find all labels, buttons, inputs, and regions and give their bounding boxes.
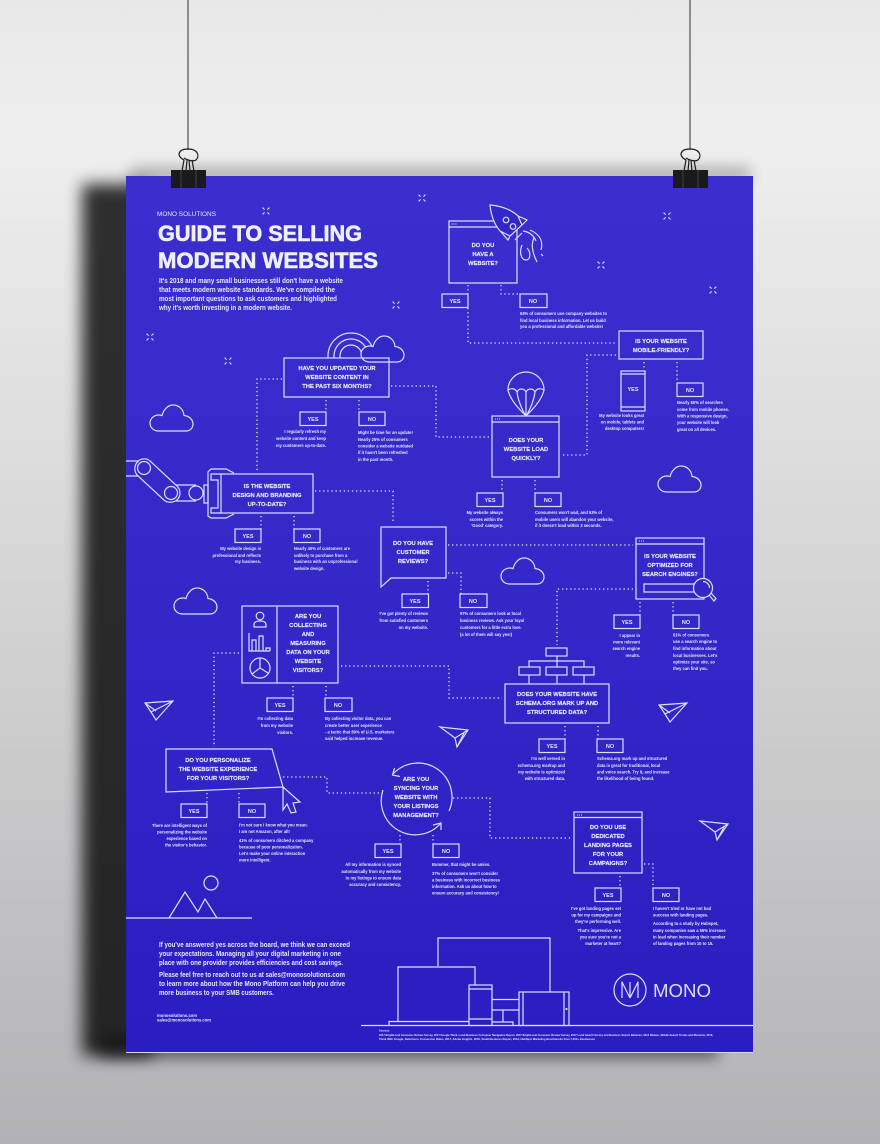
question box: ARE YOU: [295, 614, 321, 620]
no badge: [433, 844, 459, 858]
no answer text: - a tactic that 89% of U.S. marketers: [325, 730, 395, 734]
no answer text: website design.: [293, 566, 324, 571]
question box: SCHEMA.ORG MARK UP AND: [516, 701, 598, 707]
intro paragraph: It's 2018 and many small businesses still don't have a website: [159, 278, 343, 285]
icon: org chart: [519, 648, 594, 684]
question shape: THE WEBSITE EXPERIENCE: [179, 767, 257, 773]
window box: QUICKLY?: [511, 456, 541, 462]
no answer text: By collecting visitor data, you can: [325, 716, 392, 721]
no answer text: Might be time for an update!: [358, 430, 413, 435]
yes answer text: [257, 716, 294, 735]
intro paragraph: that meets modern website standards. We've compiled the: [159, 287, 335, 294]
yes badge: YES: [484, 498, 496, 504]
window box: HAVE A: [472, 252, 494, 258]
title: GUIDE TO SELLING: [158, 221, 362, 246]
binder clip right: [673, 149, 708, 188]
question text: WEBSITE WITH: [395, 795, 437, 801]
yes answer text: [152, 823, 208, 848]
yes answer text: My website design is: [220, 546, 262, 551]
icon: rainbow and cloud: [328, 333, 404, 362]
no answer text: customers for a little extra love.: [460, 625, 522, 630]
yes answer text: with structured data.: [524, 776, 565, 781]
icon: robot arm: [126, 459, 234, 518]
speech bubble: REVIEWS?: [398, 559, 429, 565]
yes answer text: [341, 862, 402, 887]
yes answer text: [467, 510, 504, 528]
no answer text: in lead when increasing their number: [653, 934, 726, 940]
no answer text: [239, 822, 314, 862]
yes badge: YES: [307, 417, 319, 423]
no answer text: Nearly 40% of customers are: [294, 546, 351, 551]
sources: [379, 1028, 713, 1041]
no answer text: Nearly 60% of searches: [677, 400, 723, 405]
speech bubble: CUSTOMER: [396, 550, 430, 556]
question: schema markup: [505, 648, 670, 781]
no answer text: create better user experience: [325, 723, 383, 728]
question box: THE PAST SIX MONTHS?: [302, 384, 372, 390]
sources: Sources:: [379, 1028, 390, 1032]
question box: [221, 474, 313, 513]
closing text: Please feel free to reach out to us at sales@monosolutions.com: [159, 972, 345, 979]
no answer text: unlikely to purchase from a: [294, 553, 348, 558]
no answer text: 97% of consumers look at local: [460, 611, 521, 616]
question: collecting data: [242, 606, 395, 741]
icon: magnifier: [694, 578, 716, 601]
no answer text: [673, 632, 718, 671]
circular arrows: [381, 763, 452, 835]
no answer text: if it doesn't load within 3 seconds.: [535, 523, 601, 528]
intro paragraph: most important questions to ask customers and highlighted: [159, 296, 337, 303]
question: updated content: [275, 333, 414, 462]
no badge: NO: [248, 809, 257, 815]
yes answer text: schema.org markup and: [518, 763, 565, 768]
question shape: DO YOU PERSONALIZE: [185, 758, 251, 764]
title: MODERN WEBSITES: [158, 248, 378, 273]
question box: STRUCTURED DATA?: [527, 710, 588, 716]
no answer text: great on all devices.: [677, 427, 716, 432]
question text: ARE YOU: [403, 777, 429, 783]
yes answer text: you sure you're not a: [580, 934, 622, 940]
yes answer text: I regularly refresh my: [284, 429, 327, 434]
yes answer text: I've got plenty of reviews: [379, 611, 429, 616]
no badge: NO: [686, 388, 695, 394]
no answer text: Schema.org mark up and structured: [597, 756, 668, 761]
speech bubble: [381, 527, 446, 587]
yes badge: YES: [242, 534, 254, 540]
question: load quickly: [467, 372, 613, 528]
window box: [449, 221, 517, 283]
icon: bar chart: [249, 633, 270, 651]
intro paragraph: why it's worth investing in a modern website.: [158, 305, 292, 312]
window box: OPTIMIZED FOR: [647, 563, 694, 569]
yes answer text: on my website.: [399, 625, 428, 630]
yes answer text: the visitor's behavior.: [165, 842, 207, 848]
window box: WEBSITE LOAD: [504, 447, 548, 453]
yes badge: YES: [621, 620, 633, 626]
yes answer text: from satisfied customers: [379, 618, 429, 623]
no answer text: [358, 430, 414, 462]
window box: WEBSITE?: [468, 261, 498, 267]
no badge: [325, 698, 352, 712]
no badge: NO: [544, 498, 553, 504]
yes answer text: to my listings to ensure data: [345, 876, 402, 880]
no answer text: [460, 611, 524, 637]
no badge: NO: [606, 744, 615, 750]
illustration: devices: [361, 938, 753, 1026]
question text: [393, 777, 439, 819]
no answer text: [677, 400, 729, 432]
no answer text: 41% of consumers ditched a company: [239, 838, 314, 843]
closing text: to learn more about how the Mono Platform can help you drive: [159, 981, 345, 988]
no answer text: said helped increase revenue.: [325, 736, 383, 741]
icon: phone with yes: YES: [627, 387, 639, 393]
question box: IS YOUR WEBSITE: [635, 339, 687, 345]
no answer text: business with an unprofessional: [294, 559, 357, 564]
question box: MOBILE-FRIENDLY?: [633, 348, 690, 354]
question: do you have a website: [442, 205, 607, 329]
closing text: If you've answered yes across the board, we think we can exceed: [159, 942, 350, 949]
yes answer text: [518, 756, 565, 781]
no badge: NO: [368, 417, 377, 423]
no badge: NO: [682, 620, 691, 626]
no answer text: Let's make your online interaction: [239, 851, 306, 856]
yes answer text: marketer at heart?: [585, 941, 621, 946]
yes badge: [442, 294, 468, 308]
window box: DEDICATED: [591, 834, 625, 840]
no badge: NO: [662, 893, 671, 899]
question box: [242, 606, 338, 683]
closing text: more business to your SMB customers.: [159, 990, 274, 997]
yes badge: YES: [409, 599, 421, 605]
window box: SEARCH ENGINES?: [642, 572, 698, 578]
window box: FOR YOUR: [593, 852, 624, 858]
dotted flow connectors: [207, 285, 677, 888]
yes answer text: website content and keep: [275, 436, 326, 441]
window box: DO YOU: [472, 243, 494, 249]
no badge: [460, 594, 487, 608]
contact links: monosolutions.com: [157, 1013, 197, 1019]
no answer text: [597, 756, 670, 781]
question box: UP-TO-DATE?: [248, 502, 287, 508]
icon: rocket: [490, 205, 543, 262]
no answer text: consider a website outdated: [358, 444, 414, 448]
question: syncing listings: [341, 763, 501, 896]
yes badge: [267, 698, 293, 712]
closing text: place with one provider provides efficiencies and cost savings.: [159, 960, 343, 967]
yes answer text: [379, 611, 429, 630]
no answer text: Nearly 25% of consumers: [358, 437, 409, 442]
closing text: your expectations. Managing all your digital marketing in one: [159, 951, 341, 958]
no answer text: many companies saw a 55% increase: [653, 928, 726, 933]
no answer text: [653, 906, 726, 946]
question box: [619, 331, 703, 359]
no answer text: in the past month.: [358, 457, 393, 462]
yes answer text: [275, 429, 327, 448]
question box: [284, 358, 389, 397]
window box: DO YOU USE: [590, 825, 626, 831]
no answer text: and voice search. Try it, and increase: [597, 770, 670, 774]
no answer text: I haven't tried or have not had: [653, 906, 712, 911]
no badge: NO: [442, 849, 451, 855]
no answer text: come from mobile phones.: [677, 407, 729, 412]
yes answer text: desktop computers!: [605, 426, 644, 431]
brand label: MONO SOLUTIONS: [157, 211, 216, 218]
no answer text: the likelihood of being found.: [597, 776, 654, 781]
window box: [574, 812, 642, 873]
icon: parachute: [508, 372, 544, 416]
no badge: [597, 739, 623, 752]
no answer text: ensure accuracy and consistency!: [432, 890, 499, 896]
title: [158, 221, 378, 273]
window box: [492, 416, 559, 477]
no badge: [239, 804, 265, 818]
no answer text: Consumers won't wait, and 53% of: [535, 510, 603, 515]
yes answer text: scores within the: [470, 517, 504, 522]
yes answer text: visitors.: [277, 730, 293, 735]
yes answer text: personalizing the website: [157, 830, 208, 834]
closing text: [159, 942, 350, 997]
yes answer text: my business.: [235, 559, 261, 564]
yes answer text: 'Good' category.: [471, 523, 503, 528]
no answer text: find local business information. Let us build: [520, 318, 606, 323]
sparkle decorations: [147, 195, 716, 364]
no answer text: [325, 716, 395, 741]
no answer text: they can find you.: [673, 666, 708, 671]
question text: MANAGEMENT?: [393, 813, 439, 819]
question box: AND: [302, 632, 314, 638]
yes badge: YES: [382, 849, 394, 855]
binder clip left: [171, 149, 206, 188]
window box: [636, 538, 704, 599]
question: personalize: [152, 749, 314, 862]
yes answer text: I'm well versed in: [531, 756, 565, 761]
yes answer text: automatically from my website: [341, 869, 402, 874]
yes badge: YES: [602, 893, 614, 899]
no badge: NO: [469, 599, 478, 605]
yes answer text: My website looks great: [599, 413, 645, 418]
question box: WEBSITE: [295, 659, 321, 665]
sources: Think With Google, Salesforce, Conversion Rates, 2017, Adobe Insights, 2016, Small Business Report, 2016, HubSpot Marketing Benchmarks from 7,000+ Businesses: [379, 1037, 596, 1041]
yes badge: [477, 493, 503, 506]
no answer text: I am not Amazon, after all!: [239, 829, 290, 834]
yes badge: YES: [188, 809, 200, 815]
window box: DOES YOUR: [509, 438, 544, 444]
question box: DATA ON YOUR: [286, 650, 331, 656]
contact links: [157, 1013, 211, 1024]
yes answer text: [612, 633, 641, 658]
no badge: [520, 294, 547, 308]
no answer text: (a lot of them will say yes!): [460, 632, 513, 637]
no answer text: of landing pages from 10 to 15.: [653, 941, 713, 946]
yes answer text: accuracy and consistency.: [349, 882, 401, 887]
question box: VISITORS?: [293, 668, 324, 674]
no answer text: if it hasn't been refreshed: [358, 450, 408, 455]
no answer text: optimize your site, so: [673, 660, 715, 664]
no answer text: local businesses. Let's: [673, 653, 718, 658]
no answer text: 51% of consumers: [673, 632, 710, 638]
sources: 2017 BrightLocal Consumer Review Survey, 2017 Google Think, Local Business Consumer Navigation Report, 2017 BrightLocal Consumer Review Survey, 2017 Local Search Survey and Business Search Behavior, 2014 Nielsen, Mobile Search Trends and Moments, 2016,: [379, 1033, 713, 1037]
yes answer text: I'm collecting data: [257, 716, 294, 721]
question box: HAVE YOU UPDATED YOUR: [298, 366, 376, 372]
no answer text: more intelligent.: [239, 858, 271, 862]
no answer text: success with landing pages.: [653, 912, 708, 918]
question box: DESIGN AND BRANDING: [232, 493, 302, 499]
yes answer text: from my website: [261, 723, 294, 728]
question shape: [166, 749, 283, 792]
yes answer text: That's impressive. Are: [578, 928, 622, 933]
yes answer text: results.: [625, 653, 640, 658]
yes answer text: [213, 546, 262, 564]
yes answer text: I've got landing pages set: [571, 906, 622, 911]
no answer text: your website will look: [677, 420, 720, 425]
yes answer text: search engine: [612, 646, 641, 651]
icon: cursor: [283, 787, 300, 813]
no answer text: data is great for traditional, local: [597, 763, 660, 768]
question shape: FOR YOUR VISITORS?: [187, 776, 250, 782]
yes badge: YES: [274, 703, 286, 709]
question: mobile friendly: [599, 331, 729, 432]
no answer text: find information about: [673, 646, 717, 651]
no answer text: [535, 510, 613, 528]
question text: SYNCING YOUR: [394, 786, 439, 792]
yes answer text: they're performing well.: [575, 919, 621, 924]
question box: WEBSITE CONTENT IN: [305, 375, 369, 381]
question: landing pages: [571, 812, 726, 946]
speech bubble: DO YOU HAVE: [393, 541, 433, 547]
yes badge: [235, 529, 261, 542]
yes badge: YES: [449, 299, 461, 305]
no badge: [535, 493, 561, 506]
yes answer text: on mobile, tablets and: [601, 420, 644, 424]
intro paragraph: [158, 278, 343, 312]
no badge: NO: [529, 299, 538, 305]
yes badge: [181, 804, 207, 818]
question: customer reviews: [379, 527, 524, 637]
question box: DOES YOUR WEBSITE HAVE: [517, 692, 597, 698]
yes answer text: My website always: [467, 510, 504, 515]
question text: YOUR LISTINGS: [393, 804, 439, 810]
no badge: [294, 529, 320, 542]
no answer text: [432, 862, 501, 896]
question box: COLLECTING: [289, 623, 327, 629]
yes answer text: [599, 413, 645, 431]
poster shadow: [82, 168, 750, 1058]
yes answer text: more relevant: [613, 640, 641, 644]
paper planes: [145, 701, 728, 840]
yes answer text: I appear in: [620, 633, 640, 638]
window box: IS YOUR WEBSITE: [644, 554, 696, 560]
hanging strings: [188, 0, 690, 150]
no answer text: [293, 546, 357, 571]
no answer text: you a professional and affordable website!: [520, 324, 603, 329]
icon: person: [254, 612, 266, 627]
yes answer text: All my information is synced: [345, 862, 401, 867]
icon: mountains and sun: [126, 876, 252, 918]
question: search engines: [612, 538, 718, 671]
yes answer text: [571, 906, 622, 946]
no badge: [653, 888, 679, 902]
no answer text: Bummer, that might be amiss.: [432, 862, 490, 867]
contact links: sales@monosolutions.com: [157, 1018, 211, 1024]
no badge: NO: [334, 703, 343, 709]
yes answer text: my customers up-to-date.: [276, 443, 326, 448]
yes answer text: my website is optimized: [518, 770, 565, 774]
no answer text: information. Ask us about how to: [432, 884, 497, 889]
poster panel: [126, 176, 753, 1053]
window box: LANDING PAGES: [584, 843, 632, 849]
yes badge: [375, 844, 401, 858]
no answer text: business reviews. Ask your loyal: [460, 618, 524, 623]
question box: MEASURING: [290, 641, 326, 647]
yes badge: [595, 888, 621, 902]
yes answer text: up for my campaigns and: [571, 912, 621, 918]
question box: [505, 684, 609, 723]
question: design and branding: [126, 459, 357, 571]
yes badge: YES: [546, 744, 558, 750]
no answer text: 37% of consumers won't consider: [432, 871, 498, 876]
no answer text: because of poor personalization.: [239, 844, 303, 850]
no answer text: mobile users will abandon your website,: [535, 517, 613, 522]
no answer text: I'm not sure I know what you mean.: [239, 822, 308, 828]
no answer text: use a search engine to: [673, 639, 718, 644]
no answer text: 63% of consumers use company websites to: [520, 311, 607, 316]
yes answer text: professional and reflects: [213, 553, 262, 558]
yes badge: [402, 594, 428, 608]
clouds: [150, 405, 701, 614]
logo: mono: MONO: [653, 980, 711, 1001]
no answer text: According to a study by Hubspot,: [653, 921, 719, 926]
yes answer text: experience based on: [166, 836, 207, 841]
yes badge: [539, 739, 565, 752]
icon: pie chart: [250, 658, 270, 678]
yes answer text: There are intelligent ways of: [152, 823, 208, 828]
no answer text: a business with incorrect business: [432, 878, 501, 882]
question box: IS THE WEBSITE: [244, 484, 290, 490]
no badge: NO: [303, 534, 312, 540]
no answer text: [520, 311, 607, 329]
no answer text: With a responsive design,: [677, 414, 727, 418]
window box: CAMPAIGNS?: [589, 861, 628, 867]
logo: mono: [614, 974, 711, 1006]
